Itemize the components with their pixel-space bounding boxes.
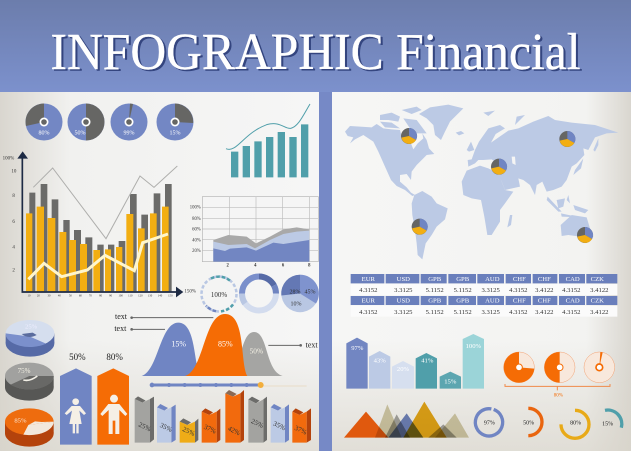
table values row 2: 3.4122 <box>535 309 553 316</box>
axis labels: 6 <box>12 220 15 225</box>
gray trend line <box>33 166 177 239</box>
table values row 2: 4.3152 <box>562 309 580 316</box>
pie 50%: 50% <box>74 130 86 136</box>
center divider <box>319 92 332 451</box>
ring 80% <box>561 410 589 438</box>
ring 97%: 97% <box>484 420 495 426</box>
bar and line chart: 10 <box>28 293 31 297</box>
box 35% light <box>271 404 289 443</box>
bracket <box>505 384 610 390</box>
box 25% gray: 25% <box>250 417 265 430</box>
table header row 1: AUD <box>485 276 500 283</box>
orange pie small <box>584 352 615 383</box>
sector pie: 10% <box>290 302 302 308</box>
table header row 2 <box>362 298 604 305</box>
house bar chart: 20% <box>397 366 410 373</box>
table header row 1: CAD <box>566 276 580 283</box>
dashed ring 100% <box>202 276 236 312</box>
table values row 2: 3.3125 <box>482 309 500 316</box>
table header row 1 <box>362 276 604 283</box>
box 35% light <box>157 404 176 443</box>
pie: Canada <box>401 128 417 144</box>
table header row 1: EUR <box>362 276 376 283</box>
box 35% light: 35% <box>272 420 287 432</box>
box 25% yellow: 25% <box>181 425 196 438</box>
bracket label: 80% <box>554 393 563 398</box>
pie: Russia <box>559 131 575 147</box>
callout lines <box>132 318 301 345</box>
orange bars <box>26 207 169 291</box>
orange pie 50% <box>544 352 575 383</box>
title: INFOGRAPHIC Financial <box>50 24 580 81</box>
axes <box>22 157 177 292</box>
panel: left background <box>0 92 319 451</box>
bar and line chart <box>3 151 196 297</box>
Americas <box>345 105 464 259</box>
table values row 2: 3.3125 <box>394 309 413 316</box>
currency table <box>351 274 617 317</box>
table values row 1: 4.3152 <box>359 287 377 294</box>
Africa <box>462 166 513 235</box>
ring 80%: 80% <box>570 420 581 426</box>
table header row 1: GPB <box>456 276 470 283</box>
world map <box>345 105 618 259</box>
area chart labels <box>227 264 311 269</box>
UK <box>467 142 474 152</box>
table header row 1: CHF <box>513 276 526 283</box>
callout texts: text <box>115 312 128 321</box>
bar and line chart: 100 <box>118 293 123 297</box>
table header row 1: USD <box>397 276 410 283</box>
table header row 2: CHF <box>538 298 551 305</box>
table header row 1: GPB <box>428 276 442 283</box>
sector pie <box>281 275 319 312</box>
box 42% orange: 42% <box>226 425 242 437</box>
gray bell: 50% <box>250 346 263 355</box>
table values row 1: 4.3152 <box>509 287 527 294</box>
axis labels: 10 <box>11 169 17 174</box>
bell curves <box>114 312 318 388</box>
Old world <box>462 111 618 243</box>
3D pie gray: 75% <box>18 367 31 375</box>
pie 50% <box>68 104 104 140</box>
gray bell <box>228 332 283 376</box>
ring 15% <box>602 410 622 428</box>
South America <box>412 191 448 259</box>
gray area <box>213 227 309 262</box>
teal curve <box>226 104 310 149</box>
box 37% orange: 37% <box>293 424 308 437</box>
table header row 2: CAD <box>566 298 580 305</box>
pie: Australia <box>577 227 593 243</box>
sector pie: 45% <box>304 290 316 296</box>
pie 80% <box>26 104 62 140</box>
table values row 1: 3.3125 <box>482 287 500 294</box>
area chart: 80% <box>192 217 201 222</box>
bar and line chart: 80 <box>99 293 103 297</box>
dashed ring 100%: 100% <box>211 291 227 299</box>
Madagascar <box>507 215 512 227</box>
table values row 2 <box>359 309 608 316</box>
box 37% orange <box>202 408 220 443</box>
pie 15%: 15% <box>170 130 180 136</box>
axis labels: 2 <box>12 269 15 274</box>
bar and line chart: 70 <box>89 293 92 297</box>
people arrows <box>60 352 129 445</box>
table values row 1: 5.1152 <box>426 287 444 294</box>
area chart labels: 8 <box>308 264 311 269</box>
blue area <box>213 240 309 262</box>
bar and line chart: 90 <box>109 293 113 297</box>
callout texts: text <box>306 340 318 349</box>
pie 99%: 99% <box>124 130 134 136</box>
orange arrow with man: 80% <box>106 352 123 362</box>
bar and line chart: 50 <box>69 293 72 297</box>
Japan <box>573 158 583 175</box>
table values row 1: 5.1152 <box>454 287 472 294</box>
table values row 2: 3.4122 <box>590 309 608 316</box>
cream trend line <box>28 234 168 279</box>
table header row 1: CHF <box>538 276 551 283</box>
table values row 2: 5.1152 <box>426 309 444 316</box>
orange progress pies <box>504 352 615 398</box>
ring 50%: 50% <box>523 420 534 426</box>
table header row 2: AUD <box>485 298 500 305</box>
area chart labels: 4 <box>254 264 257 269</box>
house bar chart: 43% <box>374 357 386 364</box>
table values row 1: 3.4122 <box>590 287 608 294</box>
area chart labels: 2 <box>227 264 230 269</box>
box 25% <box>135 396 154 443</box>
area chart <box>190 197 318 269</box>
box 25% gray <box>248 397 267 443</box>
table values row 2: 4.3152 <box>359 309 377 316</box>
bar and line chart: 130 <box>148 293 153 297</box>
Kamchatka <box>593 138 598 152</box>
Southeast Asia islands <box>547 195 588 217</box>
box 25%: 25% <box>137 421 152 433</box>
house bar chart <box>346 334 484 389</box>
bar and line chart: 110 <box>128 293 133 297</box>
pie: South America <box>412 219 428 235</box>
pie 80%: 80% <box>38 130 50 136</box>
light area <box>213 231 309 262</box>
house bar chart: 100% <box>466 343 482 350</box>
Iceland <box>456 131 464 135</box>
Eurasia <box>468 116 618 195</box>
axis labels: 8 <box>12 194 15 199</box>
ring 15%: 15% <box>602 422 613 428</box>
box 25% yellow <box>180 418 198 443</box>
northern islands <box>483 111 525 125</box>
sector pie: 28% <box>290 290 300 296</box>
callout texts <box>114 312 318 349</box>
bar and line chart: 40 <box>58 293 61 297</box>
table values row 1: 3.4122 <box>535 287 553 294</box>
orange pie 75% <box>504 352 534 383</box>
box 42% orange <box>225 390 244 443</box>
blue arrow with woman: 50% <box>69 352 86 362</box>
Caspian sea <box>512 157 516 165</box>
ring 97% <box>471 405 507 440</box>
table header row 2: GPB <box>456 298 470 305</box>
3D boxes <box>135 390 311 443</box>
pie 99% <box>110 104 148 140</box>
area chart: 60% <box>192 228 201 233</box>
table values row 1: 3.3125 <box>394 287 413 294</box>
table header row 1: CZK <box>591 276 604 283</box>
progress rings <box>471 405 622 440</box>
orange bell <box>185 314 247 376</box>
bar and line chart: 120 <box>138 293 143 297</box>
area chart: 20% <box>192 249 201 254</box>
pie 15% <box>156 104 194 140</box>
house bar chart: 15% <box>444 379 457 386</box>
table header row 2: EUR <box>362 298 376 305</box>
teal growth chart <box>226 104 310 177</box>
bar and line chart: 60 <box>79 293 82 297</box>
bar and line chart: 140 <box>158 293 163 297</box>
pie row: four small pies <box>26 104 194 140</box>
Greenland <box>419 105 463 140</box>
table values row 1 <box>359 287 608 294</box>
triangle mountains <box>344 402 469 438</box>
Australia <box>561 215 593 243</box>
bar and line chart: 30 <box>48 293 51 297</box>
panel: right background <box>332 92 631 451</box>
area chart labels: 6 <box>282 264 285 269</box>
table values row 1: 4.3152 <box>562 287 580 294</box>
ring 50% <box>523 408 542 436</box>
axis labels: 100% <box>3 156 14 161</box>
blue bell <box>142 323 201 376</box>
table values row 2: 5.1152 <box>454 309 472 316</box>
3D pie blue: 25% <box>25 323 38 330</box>
table values row 2: 4.3152 <box>509 309 527 316</box>
North America <box>345 124 434 196</box>
table header row 2: USD <box>397 298 410 305</box>
stacked 3D pies <box>5 320 54 447</box>
donut chart <box>242 276 276 310</box>
house bar chart: 41% <box>421 358 434 365</box>
Arctic islands <box>380 107 427 133</box>
table header row 2: CHF <box>513 298 526 305</box>
table header row 2: GPB <box>428 298 442 305</box>
callout texts: text <box>114 324 127 333</box>
house bar chart: 97% <box>351 345 364 352</box>
axis labels <box>3 156 196 295</box>
gray bars <box>29 184 172 291</box>
table header row 2: CZK <box>591 298 604 305</box>
blue bell: 15% <box>171 340 186 349</box>
box 37% orange <box>292 408 311 443</box>
header band <box>0 0 631 92</box>
box 37% orange: 37% <box>202 423 218 436</box>
area chart: 40% <box>192 238 201 243</box>
pie: Middle East <box>491 159 507 175</box>
axis labels: 4 <box>12 245 15 250</box>
axis labels: 150% <box>184 290 196 295</box>
bar and line chart: 20 <box>37 293 40 297</box>
slider <box>150 382 307 388</box>
orange bell: 85% <box>218 340 233 349</box>
title: INFOGRAPHIC Financial <box>52 26 582 82</box>
bar and line chart: 150 <box>168 293 173 297</box>
area chart: 100% <box>190 205 201 210</box>
box 35% light: 35% <box>158 421 174 434</box>
3D pie orange: 85% <box>14 418 27 425</box>
